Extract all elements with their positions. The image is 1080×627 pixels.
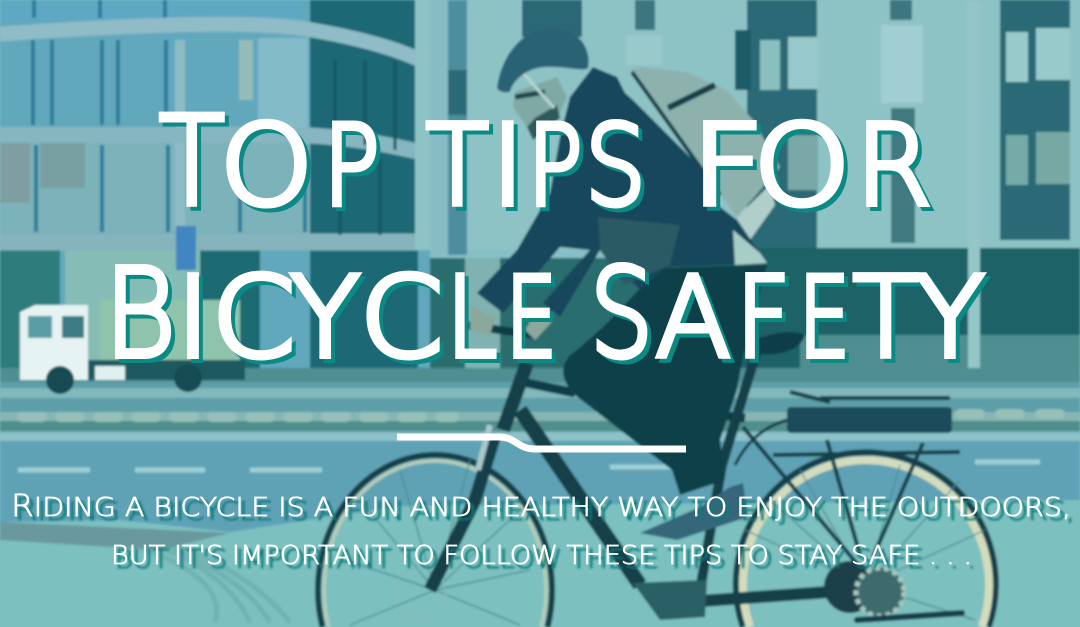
title line 2: Y: [916, 254, 984, 383]
title line 1: S: [585, 102, 646, 231]
title line 2: F: [736, 254, 790, 383]
title line 1: T: [159, 91, 224, 233]
title line 2: S: [590, 243, 653, 385]
right apartment building: [415, 0, 1080, 375]
title line 1: R: [856, 102, 932, 231]
shoe: [640, 483, 748, 540]
title line 2: C: [212, 254, 295, 383]
battery: [787, 407, 952, 433]
subtitle line 1: RIDING A BICYCLE IS A FUN AND HEALTHY WAY TO ENJOY THE OUTDOORS,: [11, 489, 1071, 524]
title line 2: B: [104, 243, 176, 385]
title line 2: A: [656, 254, 730, 383]
hands: [470, 305, 495, 335]
title: [104, 91, 984, 385]
title line 2: Y: [291, 254, 360, 383]
motor: [633, 580, 707, 620]
bicycle: [318, 325, 996, 627]
title line 2: C: [360, 254, 443, 383]
front wheel: [318, 455, 552, 627]
backpack: [630, 67, 780, 217]
cyclist legs: [563, 265, 767, 495]
truck: [20, 300, 245, 394]
title line 2: I: [177, 254, 210, 383]
rear wheel: [736, 452, 996, 627]
title line 1: P: [323, 102, 380, 231]
title line 2: T: [853, 254, 918, 383]
title line 1: O: [754, 102, 850, 231]
title line 2: E: [799, 254, 850, 383]
helmet: [497, 28, 589, 92]
cyclist jacket: [477, 67, 767, 317]
face: [513, 77, 567, 140]
cyclist: [470, 28, 780, 540]
saddle: [745, 332, 805, 354]
subtitle line 2: BUT IT'S IMPORTANT TO FOLLOW THESE TIPS TO STAY SAFE . . .: [111, 541, 972, 571]
title line 1: O: [220, 102, 313, 231]
title line 1: F: [691, 102, 764, 231]
left glass building: [0, 0, 430, 375]
divider line: [397, 437, 686, 449]
title line 2: L: [447, 254, 497, 383]
subtitle: [11, 489, 1071, 571]
frame: [503, 363, 527, 430]
title line 1: I: [492, 102, 524, 231]
title line 1: P: [528, 102, 582, 231]
title line 2: E: [506, 254, 557, 383]
street and pavement: [0, 368, 1080, 627]
title line 1: T: [426, 102, 488, 231]
